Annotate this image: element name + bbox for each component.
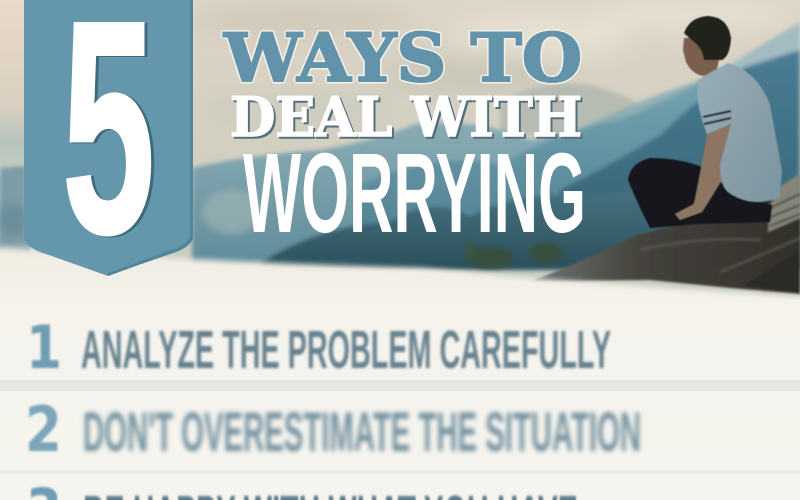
illustration: man sitting on a ledge (628, 16, 782, 228)
trousers (628, 158, 772, 228)
near dark ridge (560, 50, 800, 270)
middle ridge (362, 82, 698, 226)
title (223, 19, 586, 256)
valley bottom (262, 190, 650, 270)
speckled valley (0, 190, 262, 236)
list item 1 (26, 313, 611, 383)
number 2: 2 (25, 393, 62, 466)
neck and face (683, 38, 720, 76)
panel: mountain photo header (0, 0, 800, 300)
shirt (697, 63, 782, 202)
list item 2 (25, 393, 641, 466)
divider (0, 380, 800, 391)
photo fade into the lower panel (0, 245, 800, 500)
hazy far peak (500, 83, 640, 135)
number 1: 1 (26, 313, 62, 383)
rock ledge (530, 174, 800, 294)
title line: deal with shadow: DEAL WITH (232, 87, 584, 151)
list item 3 (26, 475, 578, 500)
divider (0, 470, 800, 474)
banner with number 5 (24, 0, 193, 298)
title line: ways to: WAYS TO (223, 19, 582, 97)
hair (684, 16, 731, 60)
sleeve stripes (703, 111, 731, 124)
panel: blurred list (0, 313, 800, 474)
arm (675, 125, 733, 220)
title line: deal with: DEAL WITH (230, 85, 582, 149)
left valley sliver (0, 166, 26, 245)
far ridge (730, 22, 800, 70)
title line: ways to outline: WAYS TO (223, 19, 582, 97)
shrubs (465, 241, 563, 269)
